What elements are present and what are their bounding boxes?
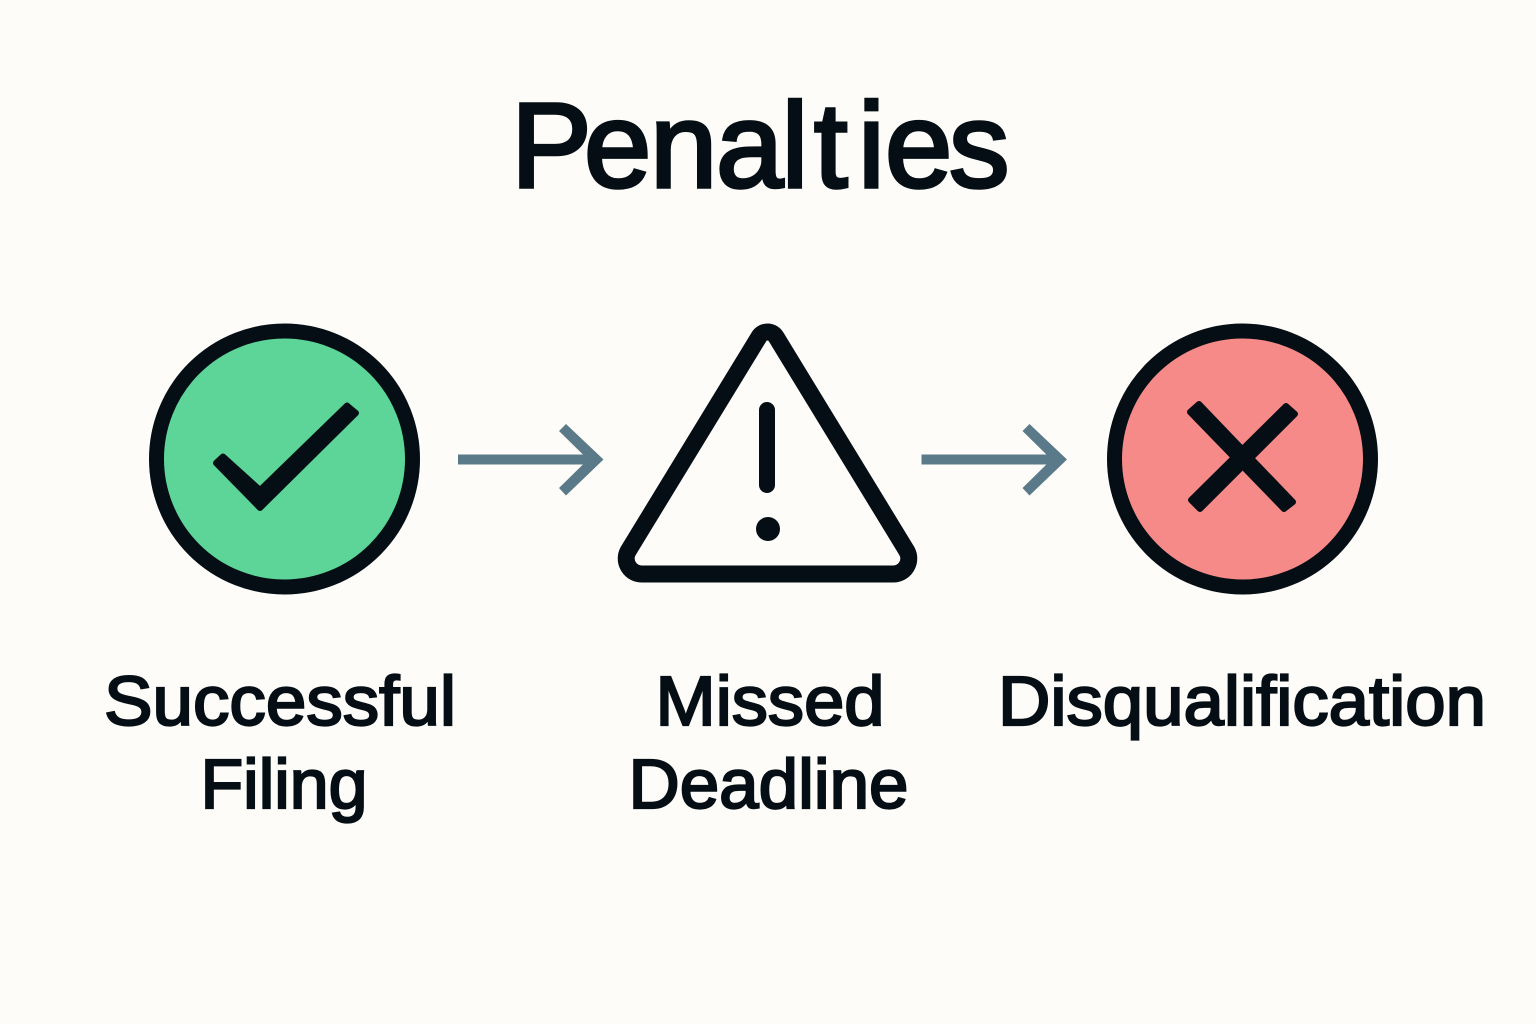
label: disqualification: Disqualification <box>998 662 1486 740</box>
icon: red x circle <box>1114 331 1370 587</box>
label: successful filing: Filing <box>200 745 368 823</box>
label: missed deadline <box>628 662 908 823</box>
icon: warning triangle <box>626 332 909 574</box>
label: successful filing: Successful <box>104 662 456 740</box>
icon: green check circle <box>156 331 412 587</box>
arrow: deadline to disqualification <box>922 424 1067 496</box>
label: missed deadline: Deadline <box>628 745 908 823</box>
label: missed deadline: Missed <box>656 662 884 740</box>
label: successful filing <box>104 662 456 823</box>
title: Penalties <box>511 77 1010 213</box>
arrow: filing to deadline <box>458 424 604 496</box>
